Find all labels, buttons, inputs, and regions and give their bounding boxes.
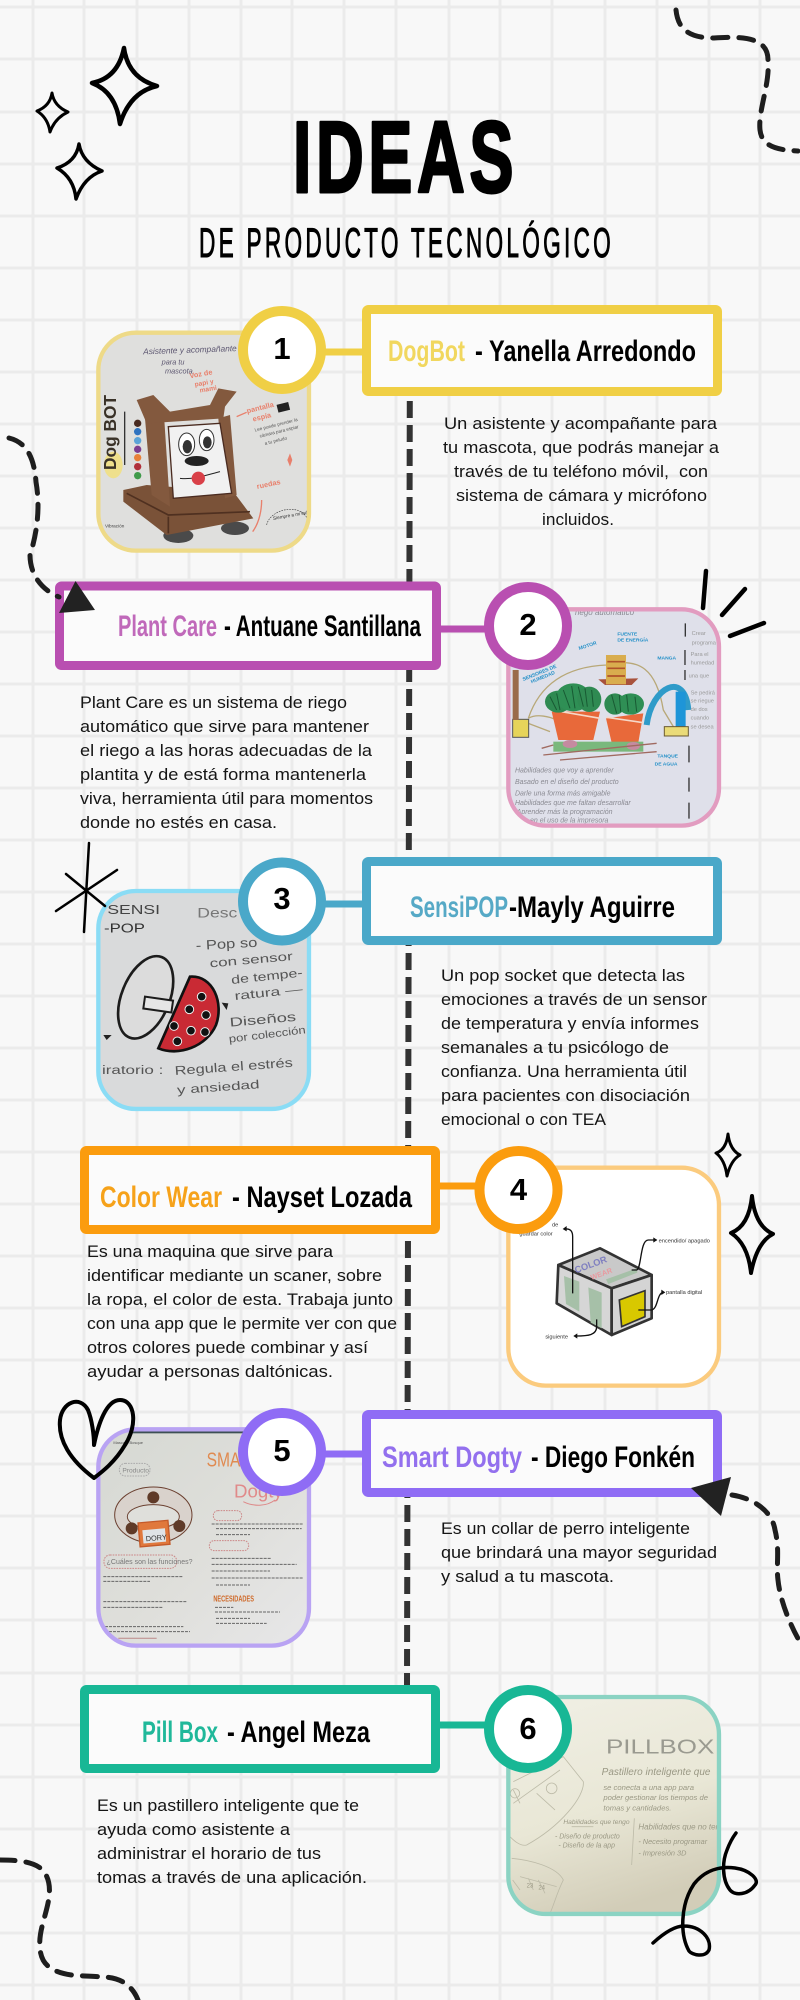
- description: SensiPOP: [441, 967, 708, 1129]
- description: Color Wear: [87, 1243, 397, 1381]
- image: Color Wear sketch: WEAR: [589, 1266, 614, 1282]
- description: DogBot: incluidos.: [542, 511, 614, 529]
- connector: [324, 900, 364, 908]
- image: DogBot sketch: papi y: [194, 378, 215, 389]
- header: SensiPOP: SensiPOP: [410, 891, 508, 924]
- header: Color Wear: - Nayset Lozada: [232, 1181, 412, 1214]
- header: Color Wear: [84, 1150, 436, 1230]
- image: SensiPOP sketch: Regula el estrés: [174, 1056, 293, 1078]
- icon: sparkles right: [716, 1134, 773, 1273]
- header: Pill Box: [84, 1690, 436, 1768]
- description: Plant Care: viva, herramienta útil para momentos: [80, 790, 373, 808]
- image: Color Wear sketch: [506, 1166, 722, 1388]
- timeline dashed line: [407, 305, 410, 1686]
- description: Smart Dogty: que brindará una mayor seguridad: [441, 1544, 717, 1562]
- connector: [324, 1450, 364, 1458]
- image: SensiPOP sketch: por colección: [228, 1024, 307, 1046]
- header: DogBot: DogBot: [388, 335, 465, 368]
- image: DogBot sketch: mascota: [165, 366, 193, 375]
- image: Color Wear sketch: pantalla digital: [666, 1290, 702, 1296]
- panel: SensiPOP: [90, 862, 718, 1129]
- icon: burst lines: [703, 571, 764, 636]
- image: Color Wear sketch: guardar color: [519, 1232, 553, 1238]
- description: Color Wear: con una app que le permite ver con que: [87, 1315, 397, 1333]
- image: SensiPOP sketch: Desc: [197, 904, 237, 920]
- image: Plant Care sketch: Habilidades que voy a aprender: [515, 768, 614, 775]
- header: SensiPOP: -Mayly Aguirre: [509, 891, 675, 924]
- image: Plant Care sketch: MANGA: [657, 655, 677, 661]
- image: DogBot sketch: ruedas: [256, 477, 281, 491]
- image: Plant Care sketch: Darle una forma más amigable: [515, 791, 611, 798]
- connector: [438, 1182, 476, 1190]
- header: Plant Care: Plant Care: [118, 610, 217, 643]
- image: Color Wear sketch: encendido/ apagado: [659, 1239, 710, 1245]
- description: Plant Care: [80, 694, 373, 832]
- image: SensiPOP sketch: SENSI: [107, 903, 160, 917]
- image: Pill Box sketch: Habilidades que no tengo: [638, 1822, 729, 1831]
- header: Plant Care: - Antuane Santillana: [224, 610, 421, 643]
- panel: Pill Box: [84, 1690, 730, 1923]
- connector: [439, 626, 486, 632]
- description: SensiPOP: emociones a través de un sensor: [441, 991, 708, 1009]
- description: Pill Box: [97, 1797, 367, 1887]
- header: Smart Dogty: Smart Dogty: [382, 1441, 522, 1474]
- header: DogBot: [366, 310, 718, 392]
- image: Pill Box sketch: PILLBOX: [606, 1736, 714, 1758]
- image: SensiPOP sketch: [96, 888, 312, 1112]
- panel: Color Wear: [84, 1150, 730, 1393]
- image: Smart Dogty sketch: DORY: [145, 1533, 167, 1543]
- image: Plant Care sketch: TANQUE: [657, 753, 679, 759]
- title: IDEAS: [293, 102, 518, 214]
- description: SensiPOP: emocional o con TEA: [441, 1111, 606, 1129]
- connector: [324, 348, 364, 356]
- image: DogBot sketch: Vibración: [105, 524, 125, 529]
- image: Plant Care sketch: de dos: [691, 707, 708, 713]
- description: Pill Box: administrar el horario de tus: [97, 1845, 321, 1863]
- description: DogBot: tu mascota, que podrás manejar a: [443, 439, 720, 457]
- image: Pill Box sketch: se conecta a una app para: [603, 1783, 694, 1792]
- image: Plant Care sketch: SENSORES DE: [522, 664, 558, 683]
- description: Color Wear: la ropa, el color de esta. Trabaja junto: [87, 1291, 393, 1309]
- image: DogBot sketch: [96, 330, 312, 553]
- description: SensiPOP: semanales a tu psicólogo de: [441, 1039, 669, 1057]
- image: Smart Dogty sketch: SMAR: [207, 1449, 252, 1472]
- description: Pill Box: ayuda como asistente a: [97, 1821, 291, 1839]
- image: Smart Dogty sketch: [96, 1427, 312, 1648]
- description: Plant Care: plantita y de está forma mantenerla: [80, 766, 367, 784]
- image: Plant Care sketch: se riegue: [691, 699, 714, 705]
- panel: Smart Dogty: [90, 1413, 718, 1653]
- image: Smart Dogty sketch: ¿Cuáles son las funciones?: [107, 1559, 193, 1566]
- description: SensiPOP: para pacientes con disociación: [441, 1087, 690, 1105]
- description: Plant Care: Plant Care es un sistema de riego: [80, 694, 347, 712]
- image: Plant Care sketch: Crear: [692, 631, 706, 637]
- image: DogBot sketch: mami: [199, 385, 218, 395]
- image: Plant Care sketch: riego automático: [575, 608, 635, 617]
- description: SensiPOP: confianza. Una herramienta útil: [441, 1063, 687, 1081]
- number badge 5: 5: [273, 1433, 291, 1468]
- image: DogBot sketch: cámara para espiar: [259, 424, 300, 439]
- image: Plant Care sketch: una que: [689, 674, 709, 680]
- image: DogBot sketch: Lee puede prender la: [254, 417, 299, 433]
- header: Plant Care: [60, 586, 436, 666]
- header: Color Wear: Color Wear: [100, 1181, 222, 1214]
- image: Pill Box sketch: 23: [527, 1883, 534, 1889]
- description: DogBot: sistema de cámara y micrófono: [456, 487, 707, 505]
- description: Smart Dogty: [441, 1520, 717, 1586]
- image: SensiPOP sketch: - Pop so: [195, 935, 258, 953]
- image: Plant Care sketch: Para el: [691, 652, 709, 658]
- image: SensiPOP sketch: de tempe-: [231, 966, 303, 987]
- number badge 1: 1: [273, 331, 291, 366]
- image: Plant Care sketch: Aprender más la programación: [516, 809, 613, 816]
- image: Pill Box sketch: - Necesito programar: [638, 1837, 708, 1846]
- image: Pill Box sketch: tomas y cantidades.: [603, 1804, 671, 1813]
- image: Plant Care sketch: MOTOR: [578, 640, 598, 652]
- icon: loop doodle: [653, 1833, 756, 1955]
- description: DogBot: [443, 415, 720, 529]
- panel: Plant Care: [60, 586, 730, 833]
- image: SensiPOP sketch: y ansiedad: [177, 1077, 260, 1097]
- number badge 4: 4: [510, 1172, 528, 1207]
- image: Plant Care sketch: HUMEDAD: [530, 670, 556, 685]
- image: Plant Care sketch: cuando: [691, 715, 709, 721]
- header: Smart Dogty: [366, 1414, 718, 1492]
- number badge 5: [243, 1413, 321, 1491]
- description: Plant Care: automático que sirve para mantener: [80, 718, 370, 736]
- description: Pill Box: Es un pastillero inteligente que te: [97, 1797, 359, 1815]
- description: Color Wear: identificar mediante un scaner, sobre: [87, 1267, 382, 1285]
- header: SensiPOP: [366, 862, 718, 940]
- header: Pill Box: Pill Box: [142, 1716, 218, 1749]
- number badge 4: [480, 1151, 558, 1229]
- image: DogBot sketch: pantalla: [246, 400, 276, 415]
- number badge 2: 2: [519, 607, 537, 642]
- image: Plant Care sketch: se desea: [691, 724, 714, 730]
- panel: DogBot: [90, 310, 720, 558]
- description: Smart Dogty: y salud a tu mascota.: [441, 1568, 614, 1586]
- description: SensiPOP: Un pop socket que detecta las: [441, 967, 685, 985]
- connector: [438, 1722, 486, 1728]
- image: Plant Care sketch: en el uso de la impresora: [530, 818, 609, 825]
- description: Color Wear: otros colores puede combinar y así: [87, 1339, 368, 1357]
- image: Plant Care sketch: Basado en el diseño del producto: [515, 779, 619, 786]
- image: DogBot sketch: Dog BOT: [100, 394, 120, 470]
- decorative dashed curve top right: [676, 10, 798, 151]
- description: Color Wear: Es una maquina que sirve para: [87, 1243, 334, 1261]
- image: DogBot sketch: Voz de: [189, 367, 213, 380]
- image: Color Wear sketch: COLOR: [573, 1254, 609, 1275]
- image: Plant Care sketch: humedad: [691, 660, 714, 666]
- image: Plant Care sketch: programa: [692, 640, 717, 646]
- header: DogBot: - Yanella Arredondo: [475, 335, 696, 368]
- number badge 3: 3: [273, 881, 291, 916]
- icon: dashed curve with arrowhead left: [9, 438, 95, 613]
- number badge 2: [489, 587, 567, 665]
- image: Color Wear sketch: de: [552, 1223, 558, 1229]
- image: DogBot sketch: Asistente y acompañante: [142, 343, 237, 356]
- description: DogBot: través de tu teléfono móvil, con: [454, 463, 708, 481]
- icon: asterisk doodle: [56, 843, 117, 932]
- image: Pill Box sketch: [506, 1694, 722, 1916]
- header: Pill Box: - Angel Meza: [227, 1716, 370, 1749]
- image: Plant Care sketch: DE AGUA: [655, 762, 678, 768]
- icon: sparkles top left: [37, 48, 157, 199]
- number badge 3: [243, 862, 321, 940]
- image: DogBot sketch: espía: [252, 410, 273, 424]
- image: Plant Care sketch: DE ENERGÍA: [617, 635, 649, 643]
- image: Pill Box sketch: - Diseño de la app: [558, 1842, 615, 1849]
- image: Plant Care sketch: Habilidades que me faltan desarrollar: [515, 800, 631, 807]
- image: Color Wear sketch: siguiente: [545, 1335, 568, 1341]
- description: Pill Box: tomas a través de una aplicación.: [97, 1869, 367, 1887]
- image: SensiPOP sketch: ratura —: [234, 982, 303, 1003]
- image: Pill Box sketch: poder gestionar los tiempos de: [602, 1793, 708, 1802]
- description: Color Wear: ayudar a personas daltónicas.: [87, 1363, 333, 1381]
- header: Smart Dogty: - Diego Fonkén: [531, 1441, 695, 1474]
- image: Plant Care sketch: FUENTE: [617, 632, 638, 638]
- image: Plant Care sketch: Se pedirá: [691, 690, 716, 696]
- image: Smart Dogty sketch: Dogty: [234, 1480, 283, 1501]
- icon: dashed curve with arrowhead right: [691, 1477, 800, 1642]
- image: SensiPOP sketch: con sensor: [209, 949, 293, 970]
- image: SensiPOP sketch: iratorio :: [102, 1063, 163, 1077]
- image: DogBot sketch: a tu peludo: [264, 435, 288, 446]
- image: Plant Care sketch: [506, 607, 722, 828]
- image: Smart Dogty sketch: Mascota Bosque: [113, 1440, 144, 1445]
- image: DogBot sketch: para tu: [161, 357, 184, 366]
- image: Pill Box sketch: - Diseño de producto: [555, 1833, 620, 1840]
- image: SensiPOP sketch: -POP: [104, 921, 145, 936]
- image: Smart Dogty sketch: NECESIDADES: [213, 1594, 254, 1604]
- image: DogBot sketch: Siempre a mi lado: [273, 509, 311, 521]
- image: Pill Box sketch: 24: [538, 1885, 546, 1891]
- image: Pill Box sketch: - Impresión 3D: [638, 1849, 687, 1858]
- number badge 1: [243, 311, 321, 389]
- description: SensiPOP: de temperatura y envía informes: [441, 1015, 699, 1033]
- image: Smart Dogty sketch: Producto: [122, 1467, 149, 1474]
- image: SensiPOP sketch: Diseños: [229, 1010, 297, 1030]
- decorative dashed curve bottom left: [0, 1860, 138, 2000]
- icon: heart doodle: [60, 1400, 133, 1478]
- description: Plant Care: el riego a las horas adecuadas de la: [80, 742, 373, 760]
- number badge 6: 6: [519, 1711, 537, 1746]
- image: Pill Box sketch: Habilidades que tengo: [563, 1819, 630, 1826]
- description: Smart Dogty: Es un collar de perro inteligente: [441, 1520, 690, 1538]
- description: DogBot: Un asistente y acompañante para: [444, 415, 718, 433]
- number badge 6: [489, 1690, 567, 1768]
- description: Plant Care: donde no estés en casa.: [80, 814, 277, 832]
- image: Pill Box sketch: Pastillero inteligente que: [602, 1767, 711, 1778]
